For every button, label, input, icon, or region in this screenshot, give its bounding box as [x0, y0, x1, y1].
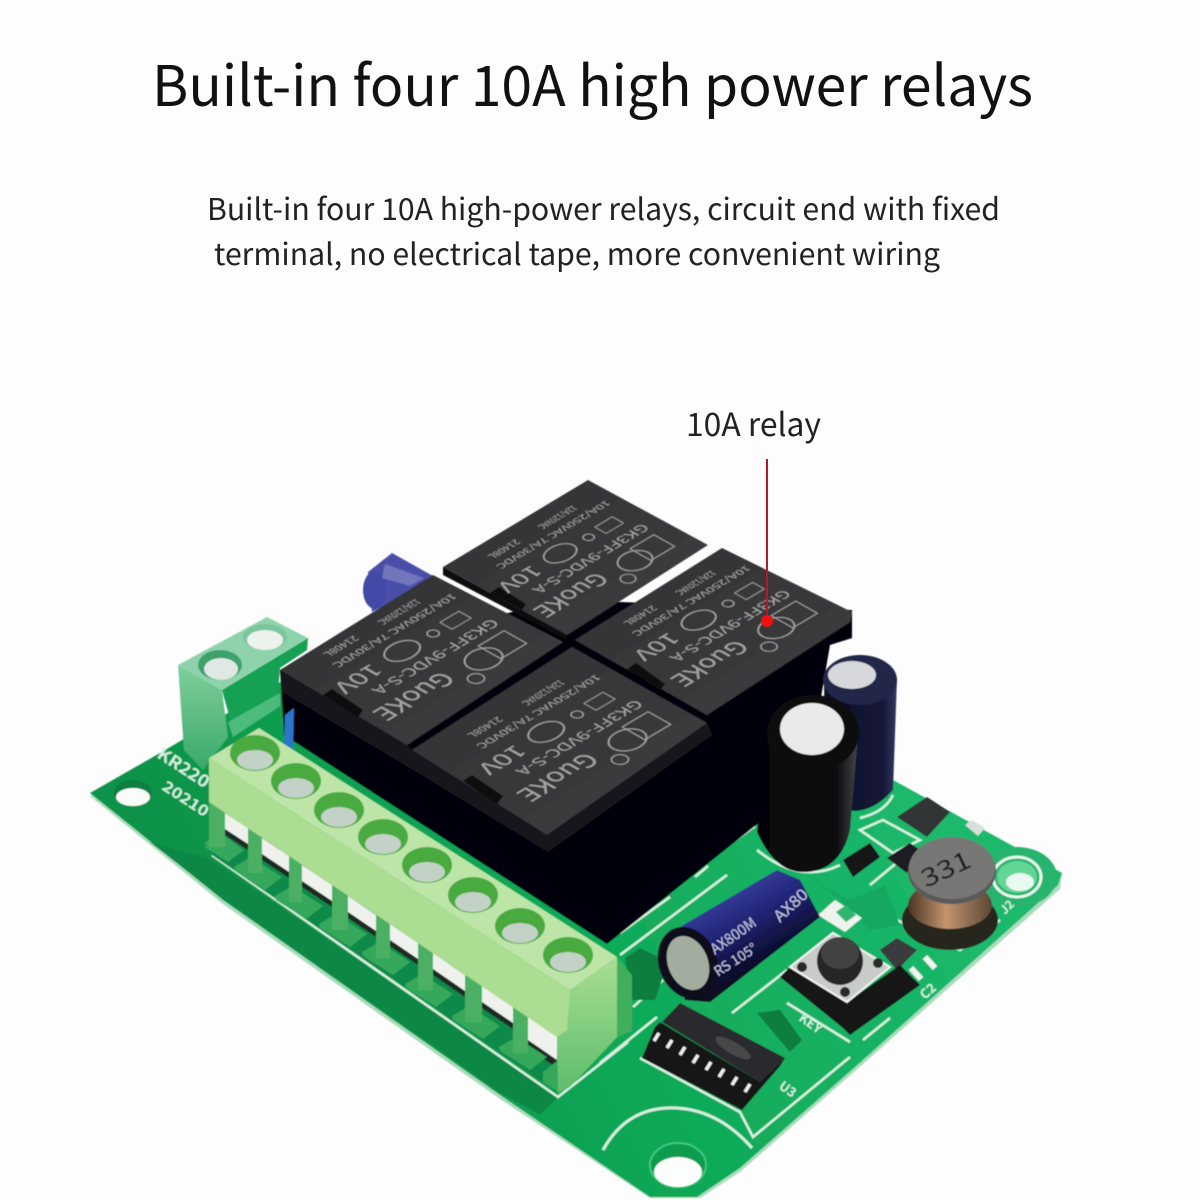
- silkscreen text: 20210: [158, 776, 213, 822]
- relay: right: 12A/120VAC: [672, 569, 721, 598]
- regulator pins: [883, 957, 935, 1003]
- relay: right: 10A/250VAC 7A/30VDC: [628, 564, 755, 639]
- feet: [205, 834, 558, 1092]
- capacitor: front blue: [647, 870, 820, 1008]
- relay: back: 12A/120VAC: [534, 504, 582, 532]
- IC chip: [642, 1003, 785, 1110]
- relay: back: [443, 480, 708, 640]
- front band: [209, 758, 570, 1037]
- description text: terminal, no electrical tape, more convenient wiring: [214, 230, 940, 274]
- screws: [198, 624, 287, 680]
- top face: [209, 728, 617, 990]
- callout: 10A relay: 10A relay: [686, 400, 821, 446]
- relay: back: 10A/250VAC 7A/30VDC: [492, 499, 615, 572]
- relay: left: 10V: [325, 660, 392, 699]
- surface mount parts: [818, 797, 985, 970]
- inductor: [902, 837, 998, 950]
- push button: [780, 933, 920, 1035]
- relay: front: 21408L: [463, 715, 508, 741]
- relay: front: 10V: [469, 741, 536, 780]
- mounting holes: [114, 780, 1057, 1187]
- inductor: 331: [914, 841, 977, 895]
- relay: front: GuoKE: [508, 748, 610, 807]
- relay: right: GuoKE: [663, 636, 760, 693]
- capacitor behind relays: [363, 553, 433, 612]
- dark gaps under pockets: [225, 813, 557, 1068]
- description text: Built-in four 10A high-power relays, circuit end with fixed: [207, 185, 1000, 229]
- silkscreen lines and pads: [212, 795, 1000, 1137]
- relay: right: GK3FF-9VDC-S-A: [664, 587, 797, 665]
- relay: back: GuoKE: [525, 568, 620, 623]
- relay: left: 10A/250VAC 7A/30VDC: [329, 592, 462, 671]
- mounting pad arc: [603, 1108, 752, 1150]
- relay: back: GK3FF-9VDC-S-A: [527, 521, 656, 597]
- relay: left: 12A/120VAC: [374, 597, 426, 628]
- relay: back: 21408L: [484, 538, 525, 561]
- relay blocks sides: [280, 600, 852, 944]
- circuit board: [90, 600, 1062, 1198]
- silkscreen text: C2: [915, 978, 940, 1003]
- description text: [207, 185, 1000, 274]
- relay: left: GK3FF-9VDC-S-A: [365, 616, 505, 698]
- end face: [557, 957, 617, 1093]
- callout: 10A relay: [686, 400, 821, 627]
- capacitor: front blue: AX800M: [706, 912, 760, 959]
- capacitor: front blue: AX80: [767, 882, 813, 927]
- title: Built-in four 10A high power relays: [152, 42, 1033, 123]
- silkscreen text: U3: [776, 1076, 801, 1101]
- large green screw terminal: [205, 728, 632, 1093]
- relay: front: GK3FF-9VDC-S-A: [509, 697, 649, 779]
- capacitor: rear navy: [823, 655, 897, 811]
- product photo: relay module board: [90, 480, 1062, 1198]
- relay: left: [280, 575, 563, 745]
- relay: front: 10A/250VAC 7A/30VDC: [473, 673, 606, 752]
- relay: left: 21408L: [319, 634, 364, 660]
- silkscreen text: KEY: [796, 1008, 827, 1038]
- capacitor: large black: [757, 695, 859, 872]
- underside: [209, 802, 558, 1093]
- relay: front: 12A/120VAC: [518, 678, 570, 709]
- screw holes: [230, 735, 593, 973]
- small screw terminal: [178, 617, 308, 770]
- silkscreen text: J2: [996, 896, 1018, 918]
- relay: front: [412, 647, 707, 835]
- white pockets: [225, 813, 557, 1060]
- silkscreen text: [153, 740, 1018, 1101]
- relay: right: 10V: [624, 628, 689, 666]
- relay: right: 21408L: [620, 604, 662, 628]
- relay: left: GuoKE: [364, 667, 466, 726]
- dark trace zones: [625, 880, 900, 1052]
- pins: [209, 802, 528, 1053]
- silkscreen text: KR220: [153, 740, 216, 793]
- capacitor: front blue: RS 105°: [710, 938, 761, 981]
- relay: back: 10V: [490, 562, 552, 598]
- relay: right: [575, 548, 852, 715]
